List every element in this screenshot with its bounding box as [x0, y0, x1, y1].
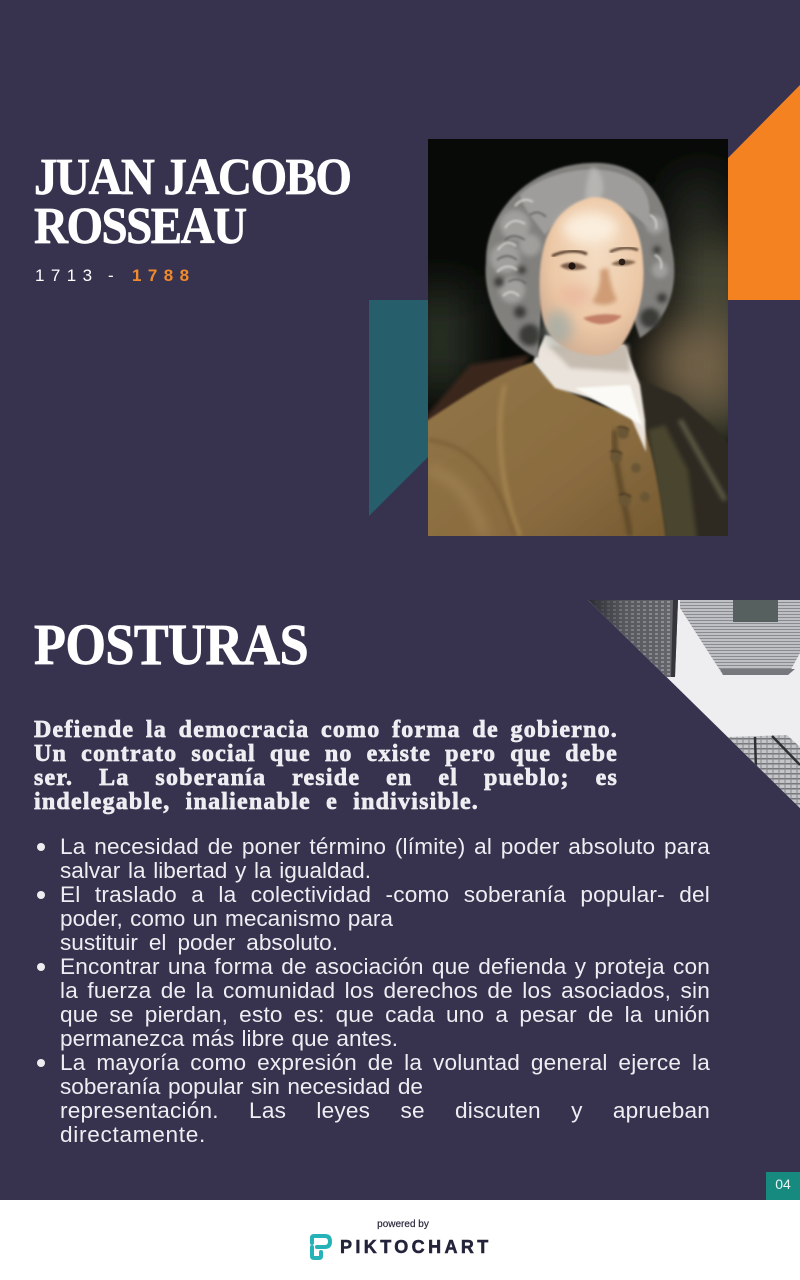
- bullet 4: La mayoría como expresión de la voluntad general ejerce la: [60, 1050, 710, 1075]
- footer band: [0, 1200, 800, 1280]
- teal corner shape: [369, 300, 428, 516]
- facial features: [552, 248, 638, 324]
- portrait of Rousseau: [428, 139, 728, 536]
- powered by: powered by: [377, 1219, 429, 1230]
- bullet 2: sustituir el poder absoluto.: [60, 930, 338, 955]
- dark jacket edge: [630, 375, 740, 560]
- intro paragraph: Defiende la democracia como forma de gobierno.: [34, 717, 618, 743]
- page number: [766, 1172, 800, 1200]
- bullet 2: poder, como un mecanismo para: [60, 906, 393, 931]
- bullet 1: [37, 834, 710, 883]
- title: ROSSEAU: [34, 198, 246, 255]
- coat: [410, 362, 668, 560]
- life dates: [35, 266, 195, 285]
- city photo triangle: [588, 600, 800, 808]
- coat shadow shoulder: [410, 355, 530, 460]
- title: JUAN JACOBO: [34, 149, 350, 206]
- wig: [486, 163, 674, 358]
- bullet list: [37, 834, 710, 1147]
- bullet 4: directamente.: [60, 1122, 206, 1147]
- bullet 4: soberanía popular sin necesidad de: [60, 1074, 423, 1099]
- title: [34, 149, 350, 255]
- page number: 04: [775, 1176, 791, 1192]
- intro paragraph: [34, 717, 618, 815]
- life dates: -: [108, 266, 120, 285]
- bottom tower: [728, 735, 800, 808]
- icon: piktochart logo: [310, 1234, 332, 1260]
- bullet 4: [37, 1050, 710, 1147]
- bullet 3: [37, 954, 710, 1051]
- intro paragraph: ser. La soberanía reside en el pueblo; es: [34, 765, 618, 791]
- neck and stock: [533, 335, 646, 452]
- bullet 2: El traslado a la colectividad -como soberanía popular- del: [60, 882, 710, 907]
- life dates: 1788: [132, 266, 195, 285]
- bullet 3: que se pierdan, esto es: que cada uno a pesar de la unión: [60, 1002, 710, 1027]
- bullet 4: representación. Las leyes se discuten y aprueban: [60, 1098, 710, 1123]
- bullet 1: salvar la libertad y la igualdad.: [60, 858, 371, 883]
- intro paragraph: Un contrato social que no existe pero que debe: [34, 741, 618, 767]
- section heading: POSTURAS: [34, 612, 308, 677]
- orange corner shape: [728, 85, 800, 300]
- left tower: [588, 600, 678, 677]
- wordmark: PIKTOCHART: [340, 1237, 492, 1257]
- bullet 3: la fuerza de la comunidad los derechos de los asociados, sin: [60, 978, 710, 1003]
- life dates: 1713: [35, 266, 98, 285]
- bullet 3: permanezca más libre que antes.: [60, 1026, 398, 1051]
- face: [539, 197, 644, 355]
- bullet 2: [37, 882, 710, 955]
- top tower: [680, 600, 800, 675]
- bullet 3: Encontrar una forma de asociación que defienda y proteja con: [60, 954, 710, 979]
- bullet 1: La necesidad de poner término (límite) al poder absoluto para: [60, 834, 710, 859]
- intro paragraph: indelegable, inalienable e indivisible.: [34, 789, 479, 815]
